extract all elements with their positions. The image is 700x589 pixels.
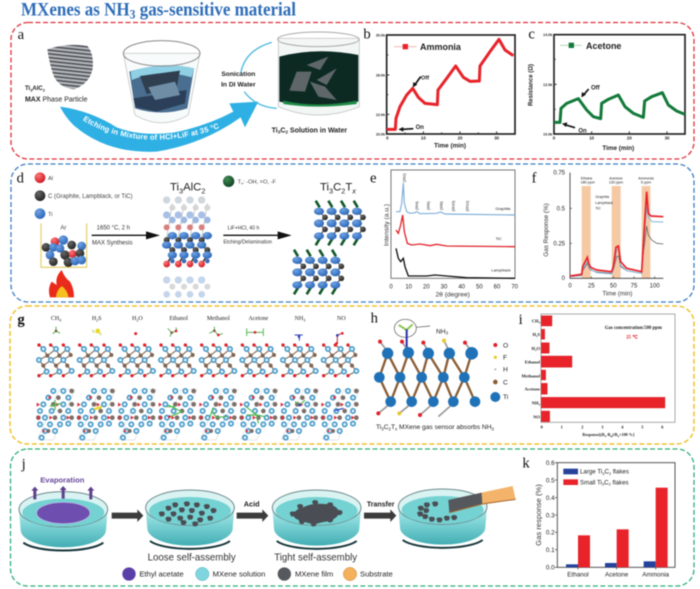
chart e: XRD: (0012): [466, 201, 470, 211]
panel i: response bar chart: 5: [641, 424, 643, 429]
chart c: acetone: Off: [591, 86, 600, 92]
label k: k: [522, 455, 530, 471]
panel: synthesis and resistance (a, b, c): [10, 21, 696, 160]
arrow: MAX synthesis: [92, 225, 160, 246]
chart f: gas response: TiC: [595, 207, 601, 211]
gas names: 4: [59, 317, 61, 322]
chart b: ammonia: 16.0k: [376, 74, 386, 78]
caption: Ti: [376, 424, 381, 431]
loose self-assembly dish: Loose self-assembly: [148, 553, 236, 564]
Ti3C2Tx heading: T: [345, 182, 352, 194]
yellow dashed frame: [10, 306, 694, 444]
chart e: XRD: Lampblack: [491, 267, 511, 272]
arrow: MAX synthesis: 1650 °C, 2 h: [97, 225, 130, 231]
legend: C: [604, 479, 609, 486]
legend: atoms: [35, 172, 277, 219]
chart e: XRD: 70: [511, 285, 519, 291]
Ti3AlC2 heading: Ti: [170, 182, 179, 194]
panel a: etching schematic: [17, 27, 360, 153]
arrow: acid: [237, 500, 268, 522]
solution caption: Ti: [272, 127, 278, 134]
Ti3C2Tx heading: 2: [341, 186, 345, 195]
MAX phase caption: AlC: [32, 86, 43, 92]
Ti3C2Tx heading: Ti: [320, 182, 329, 194]
chart e: XRD: (002): [403, 173, 407, 182]
chart f: gas response: 180 ppm: [581, 180, 595, 184]
tight self-assembly dish: [272, 490, 361, 564]
chart f: gas response: [532, 171, 663, 297]
panel i: response bar chart: Acetone: [525, 387, 540, 392]
chart b: ammonia: b: [363, 26, 371, 42]
chart frame and ticks: [534, 460, 675, 572]
legend: Small Ti: [580, 479, 602, 486]
chart f: gas response: 50: [610, 283, 617, 289]
panel i: response bar chart: 4: [538, 321, 540, 325]
title: 3: [130, 6, 136, 22]
legend: Large Ti: [580, 469, 602, 476]
adsorbed molecules on tilted view: [50, 400, 343, 423]
category labels: Ethanol: [567, 571, 589, 578]
Ti3AlC2 heading: 3: [179, 186, 183, 195]
legend: atoms: : -OH, =O, -F: [243, 179, 277, 185]
panel i: response bar chart: ×100 %]: [619, 432, 635, 437]
panel i: response bar chart: -R: [606, 432, 612, 437]
legend: 3: [602, 471, 605, 476]
category labels: Acetone: [605, 571, 629, 578]
panel i: response bar chart: NO: [533, 414, 541, 419]
panel h: NH3 adsorption schematic: h: [371, 311, 379, 327]
caption: C: [384, 424, 389, 431]
chart e: XRD: 40: [458, 285, 466, 291]
chart e: XRD: 60: [494, 285, 501, 291]
Ti3C2Tx heading: x: [351, 186, 356, 195]
gas names: Acetone: [248, 316, 269, 322]
callout: NH3: [394, 319, 449, 348]
bars: [566, 488, 668, 567]
legend: atoms: C (Graphite, Lampblack, or TiC): [48, 194, 132, 200]
arrow: step one: [112, 509, 143, 522]
chart f: gas response: Gas Response (%): [543, 203, 550, 257]
gas names: O: [138, 316, 143, 322]
title: MXenes as NH: [21, 0, 142, 20]
panel i: response bar chart: 1: [561, 424, 563, 429]
legend: 2: [609, 482, 612, 487]
chart frame and ticks: 0.5: [546, 477, 555, 484]
legend: 2: [609, 471, 612, 476]
panel i: response bar chart: g: [611, 434, 613, 438]
chart c: acetone: 10.0k: [543, 132, 553, 136]
chart frame and ticks: 0.1: [546, 547, 555, 554]
title: gas-sensitive material: [135, 0, 296, 20]
gas names: [51, 316, 346, 322]
chart frame and ticks: 0.2: [546, 530, 555, 537]
red dashed frame: [11, 22, 694, 159]
chart b: ammonia: Off: [421, 75, 429, 81]
icon: beaker with etching solution: [123, 41, 200, 123]
gas names: Methanol: [207, 316, 230, 322]
category labels: Ammonia: [642, 571, 670, 578]
chart e: XRD: 20: [423, 285, 430, 291]
solution caption: 2: [285, 130, 288, 135]
blue dashed frame: [11, 164, 694, 302]
sonication caption: Sonication: [221, 71, 255, 78]
chart c: acetone: 12.0k: [543, 83, 553, 87]
panel i: response bar chart: 6: [661, 424, 664, 429]
chart c: acetone: Resistance (Ω): [529, 64, 535, 106]
chart e: XRD: 10: [405, 285, 413, 291]
panel i: response bar chart: 2: [535, 348, 537, 352]
panel i: response bar chart: 2: [581, 424, 583, 429]
panel i: response bar chart: 4: [621, 424, 624, 429]
chart f: gas response: 5 ppm: [641, 180, 651, 184]
arrow: etching: [60, 100, 259, 153]
gas names: Ethanol: [169, 316, 188, 322]
chart frame and ticks: 0.0: [546, 565, 555, 572]
gas names: 2: [136, 317, 138, 322]
legend: materials: Substrate: [360, 570, 393, 579]
Ti3AlC2 crystal structure: [162, 196, 212, 298]
chart f: gas response: 25: [588, 283, 595, 289]
panel i: response bar chart: Methanol: [522, 373, 541, 378]
chart c: acetone: c: [528, 26, 535, 42]
Ti3C2Tx heading: 3: [329, 186, 333, 195]
chart frame and ticks: 0.3: [546, 512, 555, 519]
chart frame and ticks: 0.6: [546, 460, 555, 467]
chart f: gas response: 75: [631, 283, 638, 289]
chart f: gas response: Acetone: [609, 176, 623, 180]
MXene lattice: [374, 339, 480, 417]
arrow: sonication arc: [241, 42, 277, 108]
arrow: transfer: Transfer: [367, 502, 395, 509]
gas names: NO: [337, 316, 346, 322]
caption: T: [391, 424, 395, 431]
panel g: molecular adsorption models: [17, 312, 360, 440]
MAX phase caption: 3: [30, 87, 33, 92]
panel j: assembly process: [19, 456, 516, 581]
Ti3C2Tx heading: C: [333, 182, 341, 194]
legend: materials: MXene film: [295, 570, 333, 579]
chart f: gas response: Lampblack: [595, 201, 613, 205]
panel i: response bar chart: 3: [538, 403, 540, 407]
legend: 3: [602, 482, 605, 487]
chart e: XRD: 30: [441, 285, 448, 291]
chart e: XRD: 2θ (degree): [435, 292, 470, 299]
chart f: gas response: 130 ppm: [609, 180, 623, 184]
legend: C: [604, 469, 609, 476]
Ti3AlC2 heading: AlC: [183, 182, 201, 194]
panel i: response bar chart: H: [532, 332, 536, 337]
arrow: MAX synthesis: MAX Synthesis: [92, 240, 133, 246]
chart c: acetone: On: [578, 128, 587, 134]
chart frame and ticks: Gas response (%): [534, 484, 543, 546]
chart b: ammonia: 0: [386, 135, 389, 140]
chart c: acetone: 30: [665, 135, 670, 140]
chart c: acetone: 0: [553, 135, 556, 140]
chart frame and ticks: 0.4: [546, 495, 555, 502]
panel i: response bar chart: O: [536, 346, 540, 351]
chart f: gas response: Ammonia: [638, 176, 655, 180]
caption: 3: [492, 426, 495, 431]
chart e: XRD: (006): [427, 201, 431, 210]
chart c: acetone: Time (min): [602, 145, 634, 152]
gas names: NH: [295, 316, 303, 322]
chart e: XRD: TiC: [496, 236, 502, 241]
gas names: CH: [51, 316, 59, 322]
chart f: gas response: Graphite: [595, 195, 609, 199]
Ti3AlC2 heading: 2: [201, 186, 205, 195]
transfer dish with substrate: [398, 486, 516, 548]
chart b: ammonia: 12.0k: [376, 113, 386, 117]
icon: flame: [49, 270, 74, 297]
chart e: XRD: (0010): [452, 201, 456, 211]
chart b: ammonia: Time (min): [434, 142, 466, 149]
callout: NH3: NH: [436, 328, 446, 335]
chart b: ammonia: 30: [494, 135, 500, 140]
chart f: gas response: 0: [562, 276, 566, 282]
legend: elements: F: [503, 355, 507, 362]
gas names: H: [92, 316, 96, 322]
panel: adsorption study (g, h, i): [10, 306, 694, 444]
chart f: gas response: Time (min): [602, 290, 632, 297]
Ti3C2Tx flake top: [314, 201, 366, 245]
gas names: 3: [303, 317, 305, 322]
legend: elements: C: [503, 379, 508, 386]
legend: materials: MXene solution: [213, 570, 265, 579]
sonication caption: In DI Water: [221, 82, 256, 89]
chart e: XRD: Intensity (a.u.): [384, 204, 391, 246]
side view lattices: [37, 343, 358, 377]
MAX phase caption: [25, 86, 88, 103]
category labels: [567, 571, 670, 578]
chart e: XRD: 0: [389, 285, 393, 291]
legend: elements: O: [503, 342, 508, 349]
caption: x: [395, 426, 398, 431]
callout: NH3: 3: [446, 331, 449, 336]
panel i: response bar chart: S: [537, 332, 540, 337]
panel k: gas response bar chart: [522, 455, 675, 578]
chart b: ammonia: 20: [458, 135, 463, 140]
MAX phase caption: 2: [43, 87, 46, 92]
panel i: response bar chart: a: [618, 434, 620, 438]
legend: materials: [122, 567, 393, 581]
chart f: gas response: 0: [568, 283, 572, 289]
panel d: synthesis route: [17, 171, 366, 298]
chart e: XRD: Graphite: [495, 206, 511, 211]
solution caption: 3: [278, 130, 281, 135]
tight self-assembly dish: Tight self-assembly: [274, 553, 357, 564]
chart c: acetone: [528, 26, 685, 152]
crucible with atoms: [41, 223, 87, 267]
arrow: etching and delamination: [223, 225, 292, 246]
chart f: gas response: 0.5: [557, 206, 566, 212]
chart f: gas response: f: [532, 171, 537, 187]
chart b: ammonia: On: [416, 125, 424, 131]
evaporation dish: Evaporation: [40, 476, 85, 485]
chart b: ammonia: 10: [421, 135, 426, 140]
panels e and f: [370, 170, 663, 299]
arrow: etching and delamination: LiF+HCl, 40 h: [228, 225, 259, 231]
chart f: gas response: Ethane: [581, 176, 592, 180]
gas names: 2: [96, 317, 98, 322]
panel i: response bar chart: 0: [541, 424, 543, 429]
panel i: response bar chart: 3: [601, 424, 604, 429]
arrow: etching and delamination: Etching/Delamination: [223, 240, 272, 246]
chart e: XRD: e: [370, 171, 377, 187]
panel h and i: [371, 311, 675, 438]
arrow: transfer: [364, 502, 396, 522]
sonication caption: [221, 71, 256, 89]
chart b: ammonia: 10.0k: [376, 132, 386, 136]
panel i: response bar chart: Ethanol: [525, 359, 541, 364]
MAX phase caption: MAX Phase Particle: [25, 96, 88, 103]
chart c: acetone: 10: [589, 135, 595, 140]
panel i: response bar chart: 2: [536, 334, 538, 338]
legend: flakes: [611, 469, 629, 476]
green dashed frame: [10, 449, 694, 586]
legend: flakes: [611, 479, 629, 486]
chart c: acetone: Acetone: [586, 41, 621, 51]
panel i: response bar chart: Response[(R: [582, 432, 605, 437]
caption: 2: [389, 426, 392, 431]
legend: elements: Ti: [503, 394, 509, 401]
panels b and c: resistance charts: [363, 26, 685, 152]
legend: elements: H: [503, 366, 508, 373]
panel: self-assembly and flake size (j, k): [10, 449, 694, 586]
legend: materials: Ethyl acetate: [139, 570, 184, 579]
label d: d: [17, 171, 25, 187]
chart b: ammonia: [363, 26, 515, 149]
panel i: response bar chart: a: [605, 434, 607, 438]
solution caption: Solution in Water: [288, 127, 347, 134]
caption: 3: [381, 426, 384, 431]
panel h: NH3 adsorption schematic: [371, 311, 509, 431]
chart c: acetone: 14.0k: [543, 33, 553, 37]
arrow: etching: Etching in Mixture of HCl+LiF at 35 °C: [82, 115, 220, 140]
gas names: H: [132, 316, 136, 322]
icon: MAX phase particle: [47, 45, 93, 89]
legend: atoms: Al: [48, 176, 53, 182]
crucible with atoms: Ar: [60, 225, 66, 231]
caption: MXene gas sensor absorbs NH: [397, 424, 492, 431]
solution caption: C: [280, 127, 285, 134]
loose self-assembly dish: [146, 490, 236, 564]
arrow: acid: Acid: [244, 500, 260, 509]
legend: elements: [490, 342, 509, 402]
chart f: gas response: 0.25: [553, 241, 566, 247]
evaporation dish: [19, 476, 108, 550]
tilted view lattices: [36, 389, 360, 440]
panel i: response bar chart: [519, 312, 675, 438]
panel i: response bar chart: )/R: [612, 432, 619, 437]
label j: j: [21, 456, 26, 472]
panel i: response bar chart: NH: [532, 401, 538, 406]
chart b: ammonia: Ammonia: [420, 42, 462, 52]
chart f: gas response: 100: [650, 283, 660, 289]
legend: atoms: T: [238, 179, 241, 185]
chart e: XRD: [370, 170, 519, 299]
panel i: response bar chart: CH: [532, 319, 538, 324]
gas molecules: [53, 327, 344, 345]
legend: [563, 469, 629, 487]
chart c: acetone: 20: [627, 135, 632, 140]
gas names: S: [98, 316, 102, 322]
legend: atoms: Ti: [48, 212, 53, 218]
panel i: response bar chart: 25 ℃: [626, 333, 638, 340]
MAX phase caption: Ti: [25, 86, 30, 92]
label g: g: [17, 312, 25, 328]
label a: a: [18, 27, 25, 43]
panel i: response bar chart: H: [531, 346, 535, 351]
chart b: ammonia: 20.0k: [376, 34, 386, 38]
chart f: gas response: 0.75: [553, 171, 566, 177]
panel i: response bar chart: i: [519, 312, 523, 328]
chart e: XRD: (004): [415, 201, 419, 210]
chart e: XRD: 50: [476, 285, 483, 291]
chart e: XRD: (008): [439, 201, 443, 210]
Ti3C2Tx flake bottom: [292, 250, 344, 294]
panel: precursor study (d, e, f): [11, 164, 694, 302]
icon: beaker with Ti3C2 solution: [278, 32, 359, 115]
legend: atoms: x: [241, 180, 243, 185]
panel i: response bar chart: Gas concentration:500 ppm: [605, 326, 662, 331]
